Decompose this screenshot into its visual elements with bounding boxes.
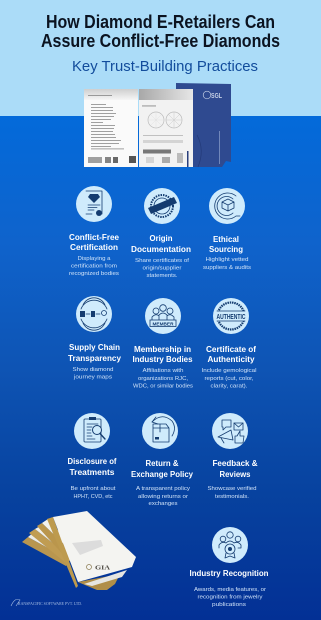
description bbox=[133, 368, 193, 390]
panel: conflict-free certification bbox=[69, 186, 120, 277]
heading: Certificate of bbox=[206, 345, 256, 354]
heading: Authenticity bbox=[208, 355, 255, 364]
icon: clipboard with magnifier bbox=[74, 413, 110, 449]
heading: Reviews bbox=[220, 470, 251, 479]
heading bbox=[212, 459, 258, 479]
heading bbox=[68, 343, 122, 363]
description: recognition from jewelry bbox=[198, 594, 263, 600]
heading: Membership in bbox=[134, 345, 191, 354]
description bbox=[136, 486, 190, 507]
description: Include gemological bbox=[202, 368, 256, 374]
description bbox=[194, 587, 266, 608]
description: origin/supplier bbox=[142, 266, 182, 272]
title: Assure Conflict-Free Diamonds bbox=[41, 31, 280, 51]
panel: disclosure of treatments bbox=[68, 413, 117, 500]
heading: Certification bbox=[70, 243, 118, 252]
icon: member group: MEMBER bbox=[152, 321, 174, 327]
top brochure: GIA bbox=[95, 564, 110, 572]
description: Show diamond bbox=[72, 367, 114, 373]
icon: people with award badge bbox=[212, 527, 248, 563]
description bbox=[72, 367, 114, 380]
icon: megaphone and messages bbox=[212, 413, 248, 449]
title bbox=[41, 12, 280, 51]
description: Showcase verified bbox=[208, 486, 256, 492]
back brochures bbox=[22, 519, 72, 566]
heading: Sourcing bbox=[209, 245, 243, 254]
description bbox=[203, 257, 251, 271]
panel: supply chain transparency bbox=[68, 296, 122, 380]
bottom sheet edges bbox=[78, 570, 127, 590]
heading: Origin bbox=[150, 234, 173, 243]
heading: Conflict-Free bbox=[69, 233, 120, 242]
heading: Supply Chain bbox=[69, 343, 120, 352]
heading bbox=[69, 233, 120, 252]
description: Highlight vetted bbox=[206, 257, 248, 263]
heading: Industry Bodies bbox=[132, 355, 193, 364]
description bbox=[202, 368, 256, 390]
logo: TransPacific Software: RANSPACIFIC SOFTWARE PVT. LTD. bbox=[18, 601, 82, 606]
right certificate page bbox=[139, 89, 193, 167]
title: How Diamond E-Retailers Can bbox=[46, 12, 275, 32]
icon: box in loop bbox=[209, 188, 245, 224]
subtitle: Key Trust-Building Practices bbox=[72, 58, 258, 75]
description: journey maps bbox=[73, 374, 112, 380]
icon: stamp badge bbox=[144, 188, 180, 224]
description: Affiliations with bbox=[142, 368, 184, 374]
panel: industry recognition bbox=[190, 527, 269, 608]
icon: authentic stamp: AUTHENTIC bbox=[216, 314, 246, 321]
heading bbox=[209, 235, 243, 254]
description bbox=[70, 486, 116, 500]
left certificate page bbox=[84, 89, 138, 167]
logo: TransPacific Software bbox=[11, 599, 82, 606]
description: Be upfront about bbox=[70, 486, 116, 492]
panel: return and exchange policy bbox=[131, 413, 194, 507]
description: WDC, or similar bodies bbox=[133, 384, 193, 390]
heading: Treatments bbox=[70, 468, 115, 477]
panel: membership in industry bodies bbox=[132, 298, 193, 390]
heading: Disclosure of bbox=[68, 457, 117, 466]
background: light blue header band bbox=[0, 0, 321, 117]
heading bbox=[132, 345, 193, 364]
heading: Feedback & bbox=[212, 459, 258, 468]
description: Share certificates of bbox=[135, 258, 190, 264]
heading: Return & bbox=[146, 459, 179, 468]
heading bbox=[131, 234, 191, 254]
description: HPHT, CVD, etc bbox=[74, 494, 113, 500]
panel: origin documentation bbox=[131, 188, 191, 279]
heading: Exchange Policy bbox=[131, 470, 194, 479]
heading: Ethical bbox=[213, 235, 239, 244]
description: testimonials. bbox=[215, 494, 249, 500]
icon: certificate with diamond bbox=[76, 186, 112, 222]
description: organizations RJC, bbox=[138, 376, 189, 382]
description bbox=[135, 258, 190, 279]
heading: Industry Recognition bbox=[190, 569, 269, 578]
description: recognized bodies bbox=[69, 271, 119, 277]
description bbox=[208, 486, 256, 500]
panel: certificate of authenticity bbox=[202, 298, 256, 390]
description: exchanges bbox=[148, 501, 178, 507]
heading: Documentation bbox=[131, 245, 191, 254]
description: A transparent policy bbox=[136, 486, 190, 492]
heading bbox=[131, 459, 194, 479]
description: Awards, media features, or bbox=[194, 587, 266, 593]
description: suppliers & audits bbox=[203, 265, 251, 271]
blue folder bbox=[176, 83, 231, 167]
heading: Transparency bbox=[68, 354, 122, 363]
description: certification from bbox=[71, 264, 118, 270]
description bbox=[69, 256, 119, 277]
icon: box with return arrow bbox=[142, 413, 178, 449]
heading bbox=[206, 345, 256, 364]
description: statements. bbox=[146, 273, 178, 279]
description: publications bbox=[212, 602, 246, 608]
description: allowing returns or bbox=[138, 494, 188, 500]
heading bbox=[68, 457, 117, 477]
brochure stack image bbox=[22, 511, 136, 590]
description: Displaying a bbox=[78, 256, 110, 262]
blue folder: SGL bbox=[211, 91, 222, 100]
description: clarity, carat). bbox=[210, 384, 248, 390]
certificate folder image bbox=[84, 83, 231, 167]
panel: ethical sourcing bbox=[203, 188, 251, 271]
panel: feedback and reviews bbox=[208, 413, 258, 500]
icon: journey arrows bbox=[76, 296, 112, 332]
description: reports (cut, color, bbox=[204, 376, 254, 382]
